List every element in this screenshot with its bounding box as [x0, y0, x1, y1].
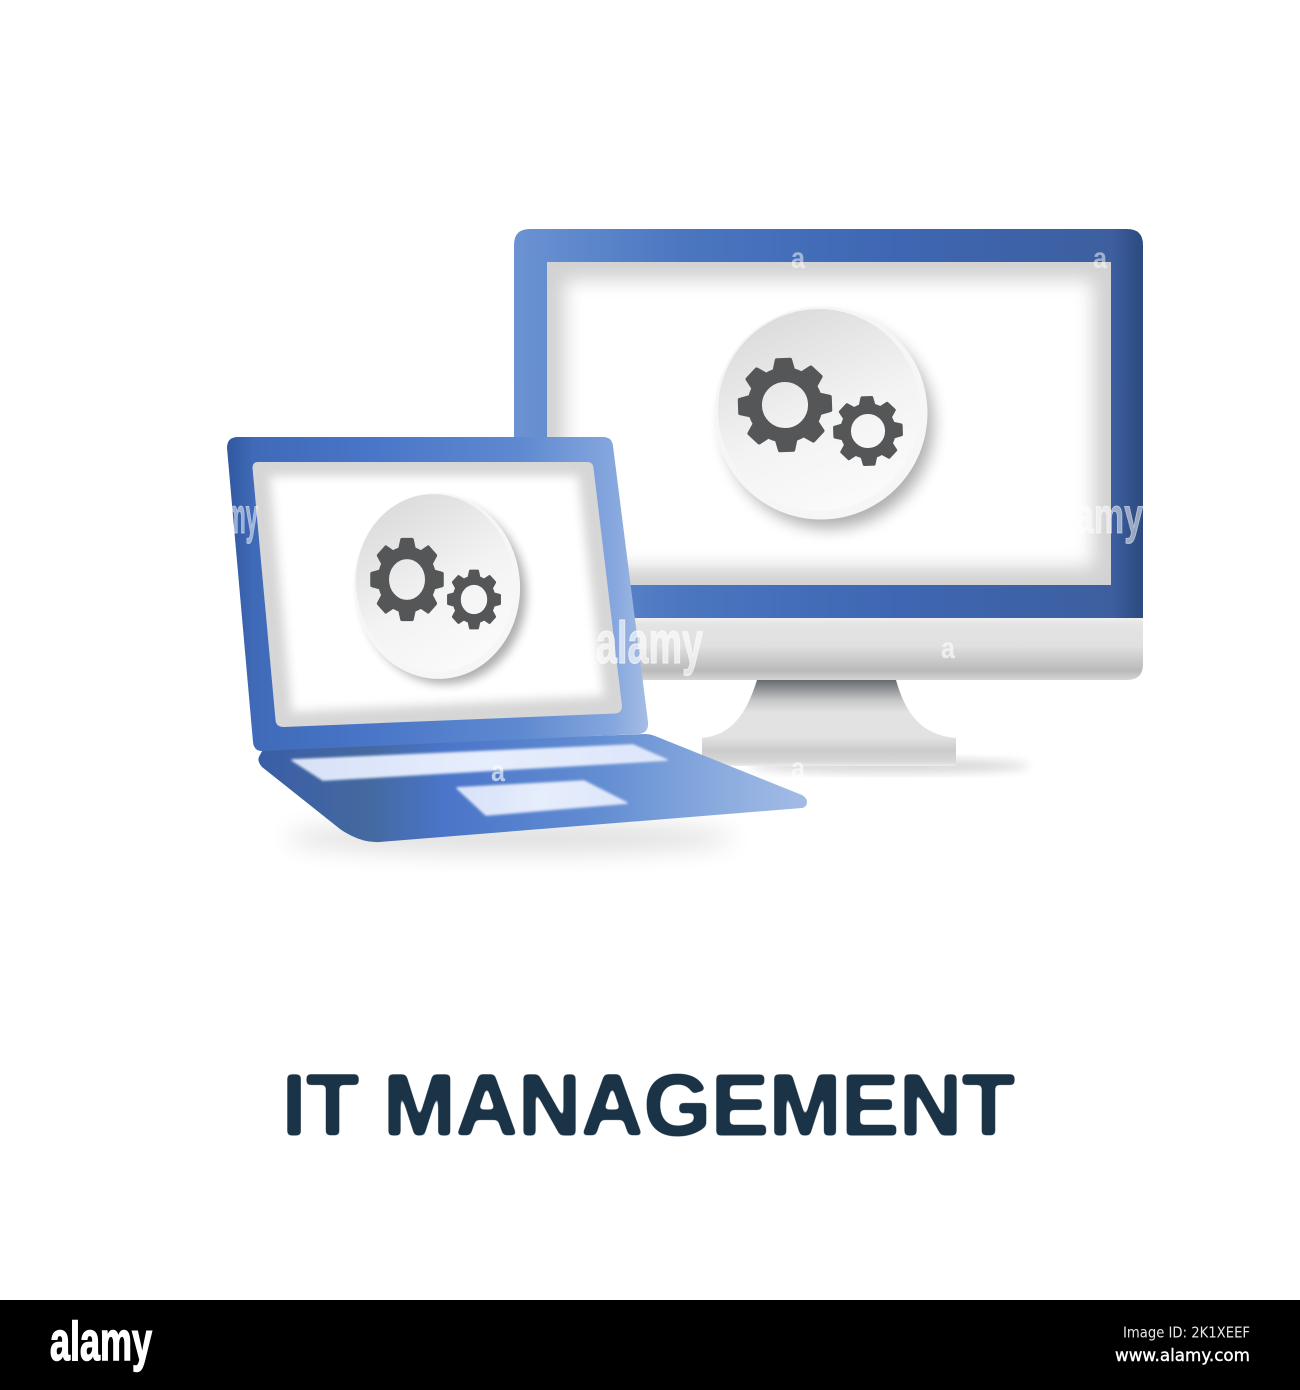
monitor bezel [514, 229, 1143, 618]
laptop ground shadow [285, 822, 735, 854]
monitor disc with gears [714, 306, 933, 528]
title: IT MANAGEMENT [282, 1057, 1015, 1154]
watermarks: a [791, 752, 805, 785]
laptop disc with gears [346, 486, 534, 691]
laptop keyboard [292, 745, 667, 780]
monitor chin [635, 618, 1143, 680]
monitor screen [547, 262, 1111, 585]
image id: Image ID: 2K1XEEF [1123, 1324, 1250, 1342]
watermarks: a [941, 632, 955, 665]
watermarks: a [1093, 242, 1107, 275]
laptop touchpad [457, 781, 627, 815]
watermarks: amy [1075, 488, 1143, 544]
watermarks: my [226, 488, 258, 544]
desktop monitor [514, 229, 1143, 773]
footer logo: alamy [50, 1310, 152, 1372]
watermarks: alamy [596, 610, 703, 676]
laptop lid [227, 437, 648, 751]
laptop [227, 437, 807, 854]
monitor stand shadow [750, 759, 1030, 773]
monitor stand neck [702, 680, 956, 745]
laptop large gear [372, 540, 442, 619]
watermarks: a [491, 755, 505, 788]
footer bar [0, 1300, 1300, 1390]
laptop keyboard base [258, 734, 807, 842]
monitor stand base [702, 738, 956, 766]
laptop small gear [448, 571, 500, 628]
small gear [833, 396, 903, 466]
laptop screen [245, 455, 630, 735]
large gear [738, 358, 832, 452]
website: www.alamy.com [1115, 1346, 1250, 1366]
watermarks: a [791, 242, 805, 275]
watermarks [226, 242, 1143, 788]
